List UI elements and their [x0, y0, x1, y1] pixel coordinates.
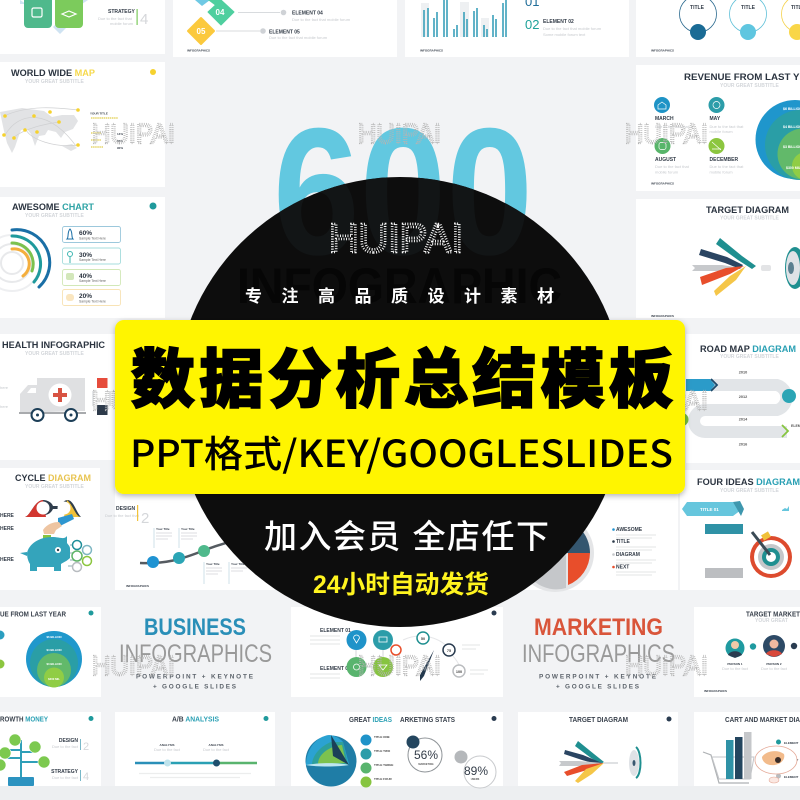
panel: a/b analysis: ANALYSIS	[209, 743, 223, 747]
panel: revenue from last year: Due to the fact that	[655, 124, 690, 129]
panel: cart and market diagram: ELEMENT	[784, 758, 799, 762]
panel: great ideas and marketing stats: 56%	[414, 748, 438, 762]
panel: diamond elements: Due to the fact that mobile forum	[292, 17, 351, 22]
heading: marketing infographics: MARKETING	[534, 614, 663, 641]
tagline: 专注高品质设计素材	[245, 286, 574, 306]
panel: diamond elements	[173, 0, 397, 57]
panel: four ideas diagram: YOUR GREAT SUBTITLE	[720, 488, 779, 494]
watermarks: HUIPAI	[92, 650, 175, 681]
panel: revenue from last year: DECEMBER	[710, 157, 739, 163]
panel: growth money: ROWTH MONEY	[0, 716, 48, 724]
panel: great ideas and marketing stats: TITLE TWO	[374, 749, 391, 753]
panel: strategy icons: 4	[140, 11, 148, 28]
panel: pie chart: TITLE	[616, 539, 631, 545]
heading: business infographics: + GOOGLE SLIDES	[153, 684, 237, 690]
panel: diamond elements: 05	[197, 27, 206, 36]
panel: diamond elements: INFOGRAPHICS	[187, 48, 210, 52]
panel: awesome chart: Sample Text Here	[79, 258, 106, 262]
panel: great ideas and marketing stats: GREAT IDEAS	[349, 717, 392, 724]
panel: revenue from last year: Due to the fact that	[710, 124, 744, 129]
panel: growth money: Due to the fact	[52, 775, 79, 780]
panel: revenue from last year: YOUR GREAT SUBTITLE	[720, 83, 779, 89]
watermarks: HUIPAI	[358, 118, 441, 149]
panel: cycle diagram: HERE	[0, 526, 15, 532]
panel: strategy icons: mobile forum	[110, 21, 134, 26]
panel: timeline	[105, 468, 280, 590]
panel: timeline: DESIGN	[116, 506, 136, 512]
panel: health infographic: here	[0, 385, 9, 390]
panel: revenue from last year	[636, 65, 800, 191]
panel: revenue from last year: MARCH	[655, 116, 674, 122]
panel: awesome chart: 40%	[79, 273, 92, 280]
panel: bar chart	[405, 0, 629, 57]
text: auto delivery: 24小时自动发货	[313, 571, 489, 599]
panel: pie chart: DIAGRAM	[616, 552, 640, 558]
panel: diamond elements: Due to the fact that mobile forum	[269, 35, 328, 40]
panel: revenue from last year: INFOGRAPHICS	[651, 182, 674, 186]
panel: target diagram: INFOGRAPHICS	[651, 314, 674, 318]
heading: marketing infographics	[522, 614, 675, 690]
panel: four ideas diagram	[680, 470, 800, 590]
panel: great ideas and marketing stats: ARKETING STATS	[400, 717, 455, 724]
panel: awesome chart: Sample Text Here	[79, 236, 106, 240]
panel: great ideas and marketing stats: TITLE THREE	[374, 763, 393, 767]
panel: title circles: TITLE	[741, 5, 756, 11]
panel: timeline: Your Title	[156, 527, 170, 531]
heading: marketing infographics: INFOGRAPHICS	[522, 640, 675, 668]
panel: revenue concentric: $4 BILLION	[46, 648, 62, 652]
watermarks: HUIPAI	[92, 385, 175, 416]
panel: growth money: Due to the fact	[52, 744, 79, 749]
panel: revenue concentric	[0, 607, 101, 697]
panel: elements and gauge: ELEMENT 02	[320, 666, 351, 672]
panel: world wide map: 65%	[117, 139, 123, 143]
panel: road map diagram: 2014	[739, 418, 748, 422]
yellow banner: PPT格式/KEY/GOOGLESLIDES	[130, 424, 673, 478]
logo: huipai: HUIPAI	[329, 215, 463, 261]
panel: target diagram small	[518, 712, 678, 786]
panel: cycle diagram	[0, 468, 100, 590]
panel: four ideas diagram: FOUR IDEAS DIAGRAM	[697, 477, 800, 488]
panel: revenue from last year: mobile forum	[710, 129, 733, 134]
panel: a/b analysis	[115, 712, 275, 786]
black circle: INFOGRAPHIC	[237, 258, 562, 314]
panel: a/b analysis: A/B ANALYSIS	[172, 716, 219, 724]
panel: pie chart: NEXT	[616, 564, 629, 570]
panel: target diagram: YOUR GREAT SUBTITLE	[720, 216, 779, 222]
panel: revenue concentric: UE FROM LAST YEAR	[0, 612, 66, 618]
panel: great ideas and marketing stats: TITLE ONE	[374, 735, 390, 739]
panel: four ideas diagram: TITLE 01	[700, 507, 719, 512]
watermarks: HUIPAI	[625, 118, 708, 149]
panel: bar chart: ELEMENT 02	[543, 19, 574, 25]
panel: growth money: STRATEGY	[51, 769, 79, 775]
panel: bar chart: 02	[525, 17, 539, 32]
panel: elements and gauge: 100	[456, 670, 462, 674]
panel: diamond elements: ELEMENT 05	[269, 30, 300, 36]
panel: world wide map	[0, 62, 165, 187]
panel: awesome chart: AWESOME CHART	[12, 202, 94, 213]
panel: title circles: INFOGRAPHICS	[651, 48, 674, 52]
heading: business infographics: INFOGRAPHICS	[119, 640, 272, 668]
panel: target market: INFOGRAPHICS	[704, 689, 727, 693]
watermarks: HUIPAI	[625, 650, 708, 681]
panel: health infographic: YOUR GREAT SUBTITLE	[25, 351, 84, 357]
panel: revenue from last year: mobile forum	[655, 170, 679, 174]
panel: growth money: 2	[83, 741, 89, 753]
panel: cycle diagram: YOUR GREAT SUBTITLE	[25, 484, 84, 490]
panel: growth money: 4	[83, 771, 89, 783]
panel: bar chart: INFOGRAPHICS	[420, 48, 443, 52]
panel: timeline: Your Title	[206, 562, 220, 566]
panel: a/b analysis: ANALYSIS	[160, 743, 174, 747]
watermarks	[92, 118, 708, 681]
panel: elements and gauge	[291, 607, 503, 697]
panel: timeline: INFOGRAPHICS	[126, 584, 149, 588]
panel: pie chart	[516, 468, 678, 592]
heading: business infographics: POWERPOINT + KEYNOTE	[136, 674, 254, 680]
panel: awesome chart: Sample Text Here	[79, 300, 106, 304]
panel: timeline: 2	[141, 510, 149, 527]
panel: health infographic: here	[0, 404, 9, 409]
panel: target diagram	[636, 199, 800, 318]
panel: target market: PERSON 1	[727, 662, 743, 666]
panel: elements and gauge: 50	[421, 637, 425, 641]
black circle	[190, 177, 610, 627]
panel: health infographic: HEALTH INFOGRAPHIC	[2, 340, 105, 351]
panel: target diagram: TARGET DIAGRAM	[706, 205, 789, 216]
yellow banner: 数据分析总结模板	[131, 344, 673, 416]
panel: awesome chart: YOUR GREAT SUBTITLE	[25, 213, 84, 219]
panel: great ideas and marketing stats: USERS	[471, 778, 480, 781]
panel: road map diagram: 2010	[739, 370, 747, 374]
panel: road map diagram: ROAD MAP DIAGRAM	[700, 344, 796, 355]
panel: strategy icons: Due to the fact that	[98, 16, 133, 21]
panel: diamond elements: ELEMENT 04	[292, 10, 323, 16]
panel: title circles: TITLE	[690, 5, 705, 11]
panel: cart and market diagram	[694, 712, 800, 786]
panel: awesome chart: 20%	[79, 293, 92, 300]
panel: world wide map: 14%	[117, 132, 123, 136]
panel: awesome chart: 30%	[79, 252, 92, 259]
panel: awesome chart: 60%	[79, 230, 92, 237]
heading: business infographics: BUSINESS	[144, 614, 246, 641]
panel: revenue concentric: $300 MIL	[48, 677, 60, 681]
panel: cycle diagram: CYCLE DIAGRAM	[15, 473, 91, 484]
panel: elements and gauge: 75	[447, 649, 451, 653]
watermarks: HUIPAI	[92, 118, 175, 149]
panel: awesome chart: Sample Text Here	[79, 279, 106, 283]
panel: great ideas and marketing stats	[291, 712, 503, 788]
big number 600: 600	[273, 91, 533, 293]
panel: target diagram small: TARGET DIAGRAM	[569, 717, 628, 724]
panel: road map diagram: YOUR GREAT SUBTITLE	[720, 354, 779, 360]
panel: revenue from last year: AUGUST	[655, 157, 676, 163]
panel: great ideas and marketing stats: TITLE FOUR	[374, 777, 392, 781]
panel: timeline: Your Title	[231, 562, 245, 566]
panel: bar chart: Some mobile forum text	[543, 32, 586, 37]
heading: marketing infographics: + GOOGLE SLIDES	[556, 684, 640, 690]
panel: growth money: DESIGN	[59, 738, 78, 744]
panel: great ideas and marketing stats: 89%	[464, 764, 488, 778]
panel: revenue concentric: $6 BILLION	[46, 635, 62, 639]
panel: revenue from last year: MAY	[710, 116, 721, 122]
panel: target market: Due to the fact	[761, 666, 788, 671]
panel: cart and market diagram: ELEMENT	[784, 741, 799, 745]
panel: timeline: Due to the fact that	[105, 513, 140, 518]
panel: revenue from last year: mobile forum	[710, 170, 733, 174]
watermarks: HUIPAI	[358, 650, 441, 681]
panel: strategy icons: STRATEGY	[108, 9, 136, 15]
heading: business infographics	[119, 614, 272, 690]
panel: title circles	[636, 0, 800, 57]
panel: cycle diagram: HERE	[0, 513, 15, 519]
panel: world wide map: YOUR GREAT SUBTITLE	[25, 79, 84, 85]
heading: marketing infographics: POWERPOINT + KEYNOTE	[539, 674, 657, 680]
panel: bar chart: Due to the fact that mobile forum	[543, 26, 602, 31]
panel: revenue from last year: Due to the fact that	[710, 164, 744, 169]
text: membership: 加入会员 全店任下	[264, 518, 549, 555]
panel: health infographic	[0, 334, 116, 460]
panel: awesome chart	[0, 197, 165, 318]
panel: revenue from last year: Due to the fact that	[655, 164, 690, 169]
yellow banner	[115, 320, 685, 494]
panel: world wide map: WORLD WIDE MAP	[11, 68, 96, 79]
black circle: 600	[273, 91, 533, 293]
panel: cart and market diagram: ELEMENT	[784, 775, 799, 779]
panel: revenue concentric: $3 BILLION	[46, 662, 62, 666]
panel: a/b analysis: Due to the fact	[203, 747, 230, 752]
panel: road map diagram: 2016	[739, 442, 747, 446]
panel: growth money	[0, 712, 101, 786]
panel: strategy icons	[0, 0, 165, 54]
panel: target market: Due to the fact	[722, 666, 749, 671]
panel: world wide map: YOUR TITLE	[90, 112, 108, 116]
panel: timeline: Your Title	[181, 527, 195, 531]
watermarks: HUIPAI	[625, 385, 708, 416]
panel: cycle diagram: HERE	[0, 557, 15, 563]
panel: target market: YOUR GREAT	[755, 618, 788, 624]
panel: great ideas and marketing stats: MARKETING	[418, 763, 434, 766]
panel: road map diagram: 2012	[739, 395, 747, 399]
panel: elements and gauge: ELEMENT 01	[320, 628, 351, 634]
panel: target market: PERSON 2	[766, 662, 782, 666]
panel: diamond elements: 04	[216, 8, 225, 17]
panel: a/b analysis: Due to the fact	[154, 747, 181, 752]
panel: target market	[694, 607, 800, 697]
panel: world wide map: 90%	[117, 146, 123, 150]
panel: road map diagram	[676, 334, 800, 463]
panel: pie chart: AWESOME	[616, 527, 643, 533]
